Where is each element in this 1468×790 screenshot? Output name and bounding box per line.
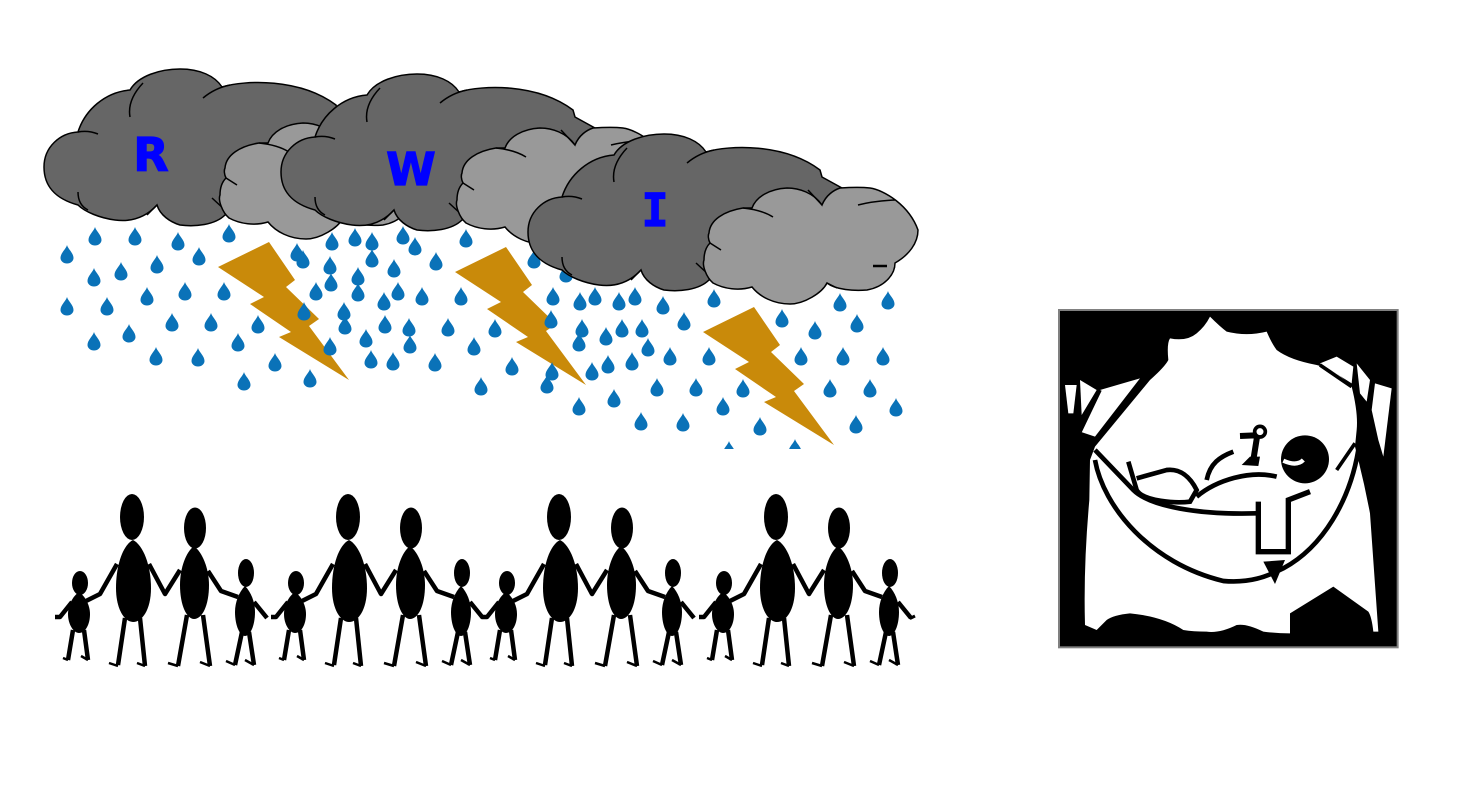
lightning bolts (218, 242, 834, 445)
sleeper seat (1242, 457, 1260, 466)
cloud I (528, 134, 918, 304)
curtain scraps (1065, 357, 1392, 457)
arrow head (1263, 560, 1285, 584)
hammock lines (1080, 365, 1358, 581)
cloud W (281, 74, 671, 244)
cloud R (44, 69, 434, 239)
rain drops (60, 224, 902, 460)
sleeper head (1255, 426, 1265, 437)
storm clouds (44, 69, 918, 304)
cloud R: R (133, 128, 169, 182)
ball (1281, 435, 1329, 483)
emblem black square (1059, 310, 1398, 647)
hammock emblem (1059, 310, 1398, 647)
row of people holding hands (55, 494, 915, 666)
white sheet shape (1085, 317, 1378, 633)
cloud W: W (386, 143, 436, 196)
cloud I: I (641, 184, 669, 237)
